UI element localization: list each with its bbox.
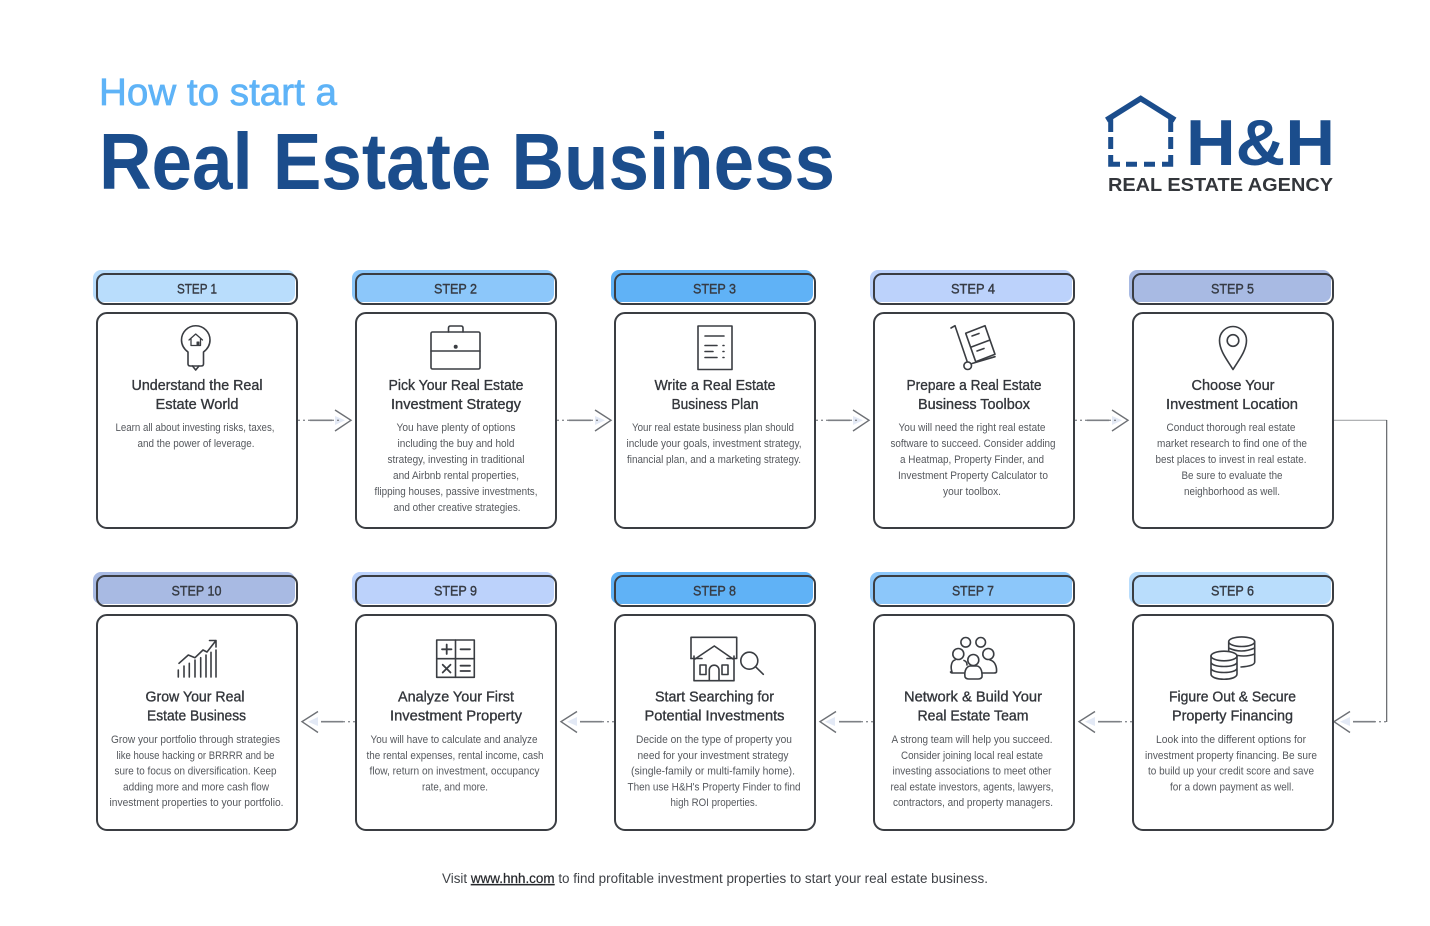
panel: step 9: Investment Property	[390, 708, 522, 724]
panel: step 4: a Heatmap, Property Finder, and	[900, 454, 1044, 466]
panel: step 1: and the power of leverage.	[138, 438, 254, 450]
arrow: step 2 to 3	[557, 410, 611, 431]
panel: step 1: Estate World	[156, 396, 238, 413]
panel: step 5: STEP 5	[1211, 282, 1254, 296]
panel: step 7: Real Estate Team	[918, 708, 1028, 724]
panel: step 4: STEP 4	[951, 282, 995, 296]
panel: step 3: Business Plan	[672, 396, 758, 413]
icon: calculator symbols	[437, 640, 474, 677]
logo wordmark: H&H	[1186, 106, 1335, 179]
panel: step 7: STEP 7	[952, 584, 994, 598]
panel: step 6: STEP 6	[1211, 584, 1254, 598]
arrow: step 1 to 2	[298, 410, 351, 431]
panel: step 9: You will have to calculate and analyze	[370, 734, 538, 746]
panel: step 5: best places to invest in real estate.	[1156, 454, 1306, 466]
panel: step 8: Start Searching for	[655, 688, 774, 706]
icon: house and magnifying glass	[691, 637, 763, 681]
icon: dashed house	[1106, 98, 1175, 164]
panel: step 8: Potential Investments	[644, 708, 784, 724]
panel: step 3: Your real estate business plan should	[632, 422, 794, 434]
panel: step 1	[93, 270, 297, 528]
panel: step 7: real estate investors, agents, lawyers,	[890, 782, 1054, 794]
panel: step 10: Grow your portfolio through strategies	[111, 734, 280, 746]
panel: step 6	[1129, 572, 1333, 830]
panel: step 8	[611, 572, 815, 830]
panel: step 10: sure to focus on diversification. Keep	[114, 766, 276, 778]
arrow: connector from step 5 to step 6	[1334, 420, 1387, 732]
icon: hand truck with boxes	[951, 326, 995, 370]
subtitle: How to start a: How to start a	[99, 72, 338, 114]
panel: step 3: include your goals, investment strategy,	[626, 438, 802, 450]
panel: step 10: Grow Your Real	[146, 688, 244, 706]
title	[99, 72, 835, 206]
panel: step 4: Prepare a Real Estate	[906, 377, 1042, 394]
panel: step 4: You will need the right real estate	[898, 422, 1046, 434]
panel: step 2: and Airbnb rental properties,	[393, 470, 519, 482]
panel: step 8: Then use H&H's Property Finder to find	[628, 782, 800, 794]
panel: step 9	[352, 572, 556, 830]
panel: step 10: like house hacking or BRRRR and be	[116, 750, 274, 762]
panel: step 8: Decide on the type of property you	[636, 734, 792, 746]
icon: team of people	[950, 638, 997, 679]
panel: step 2: STEP 2	[434, 282, 477, 296]
panel: step 4: Business Toolbox	[918, 396, 1030, 413]
panel: step 9: the rental expenses, rental income, cash	[366, 750, 544, 762]
panel: step 9: flow, return on investment, occupancy	[370, 766, 540, 778]
panel: step 6: Figure Out & Secure	[1169, 688, 1296, 706]
arrow: step 4 to 5	[1075, 410, 1128, 431]
panel: step 10: STEP 10	[172, 584, 222, 598]
panel: step 2: Investment Strategy	[391, 396, 521, 413]
panel: step 6: to build up your credit score and save	[1148, 766, 1314, 778]
panel: step 7	[870, 572, 1074, 830]
logo: H&H Real Estate Agency	[1106, 98, 1335, 195]
panel: step 8: (single-family or multi-family home).	[631, 766, 795, 778]
panel: step 1: Learn all about investing risks, taxes,	[116, 422, 274, 434]
panel: step 3: STEP 3	[693, 282, 736, 296]
panel: step 4: Investment Property Calculator to	[898, 470, 1048, 482]
panel: step 2: Pick Your Real Estate	[388, 377, 524, 394]
logo tagline: REAL ESTATE AGENCY	[1108, 175, 1333, 195]
panel: step 7: Network & Build Your	[904, 688, 1042, 706]
panel: step 2: strategy, investing in traditional	[388, 454, 524, 466]
icon: rising bar chart	[178, 640, 216, 677]
panel: step 8: need for your investment strategy	[638, 750, 789, 762]
panel: step 2: and other creative strategies.	[394, 502, 520, 514]
panel: step 3	[611, 270, 815, 528]
icon: location pin	[1220, 327, 1246, 370]
arrow: step 6 to 7	[1079, 712, 1132, 732]
panel: step 3: Write a Real Estate	[654, 377, 776, 394]
icon: light bulb with house	[182, 326, 210, 370]
panel: step 6: investment property financing. Be sure	[1145, 750, 1317, 762]
panel: step 5	[1129, 270, 1333, 528]
panel: step 7: Consider joining local real estate	[901, 750, 1043, 762]
main heading: Real Estate Business: Real Estate Business	[99, 117, 835, 206]
arrow: step 7 to 8	[820, 712, 873, 732]
panel: step 5: Choose Your	[1192, 377, 1275, 394]
panel: step 9: Analyze Your First	[398, 688, 515, 706]
panel: step 2: You have plenty of options	[396, 422, 516, 434]
panel: step 3: financial plan, and a marketing strategy.	[627, 454, 801, 466]
panel: step 7: A strong team will help you succeed.	[892, 734, 1052, 746]
arrow: step 9 to 10	[302, 712, 355, 732]
panel: step 4	[870, 270, 1074, 528]
panel: step 9: STEP 9	[434, 584, 477, 598]
panel: step 10	[93, 572, 297, 830]
icon: briefcase	[431, 326, 480, 369]
panel: step 5: Conduct thorough real estate	[1166, 422, 1296, 434]
panel: step 1: Understand the Real	[132, 377, 262, 394]
panel: step 4: your toolbox.	[943, 486, 1001, 498]
panel: step 1: STEP 1	[177, 282, 217, 296]
footer call to action: Visit www.hnh.com to find profitable investment properties to start your real estate business.	[442, 871, 988, 886]
panel: step 5: neighborhood as well.	[1184, 486, 1280, 498]
arrow: step 8 to 9	[561, 712, 614, 732]
panel: step 6: Property Financing	[1172, 708, 1293, 724]
panel: step 7: contractors, and property managers.	[893, 797, 1053, 809]
panel: step 5: Be sure to evaluate the	[1182, 470, 1282, 482]
panel: step 2	[352, 270, 556, 528]
panel: step 8: high ROI properties.	[670, 797, 758, 809]
panel: step 2: including the buy and hold	[398, 438, 514, 450]
panel: step 8: STEP 8	[693, 584, 736, 598]
panel: step 9: rate, and more.	[422, 782, 488, 794]
panel: step 4: software to succeed. Consider adding	[890, 438, 1056, 450]
panel: step 7: investing associations to meet other	[892, 766, 1052, 778]
panel: step 6: Look into the different options for	[1156, 734, 1306, 746]
panel: step 10: investment properties to your portfolio.	[110, 797, 284, 809]
panel: step 2: flipping houses, passive investments,	[374, 486, 538, 498]
icon: document	[698, 326, 732, 370]
panel: step 10: adding more and more cash flow	[123, 782, 269, 794]
panel: step 6: for a down payment as well.	[1170, 782, 1294, 794]
panel: step 10: Estate Business	[147, 708, 246, 724]
arrow: step 3 to 4	[816, 410, 869, 431]
icon: coin stacks	[1211, 637, 1255, 679]
panel: step 5: market research to find one of the	[1157, 438, 1307, 450]
panel: step 5: Investment Location	[1166, 396, 1298, 413]
